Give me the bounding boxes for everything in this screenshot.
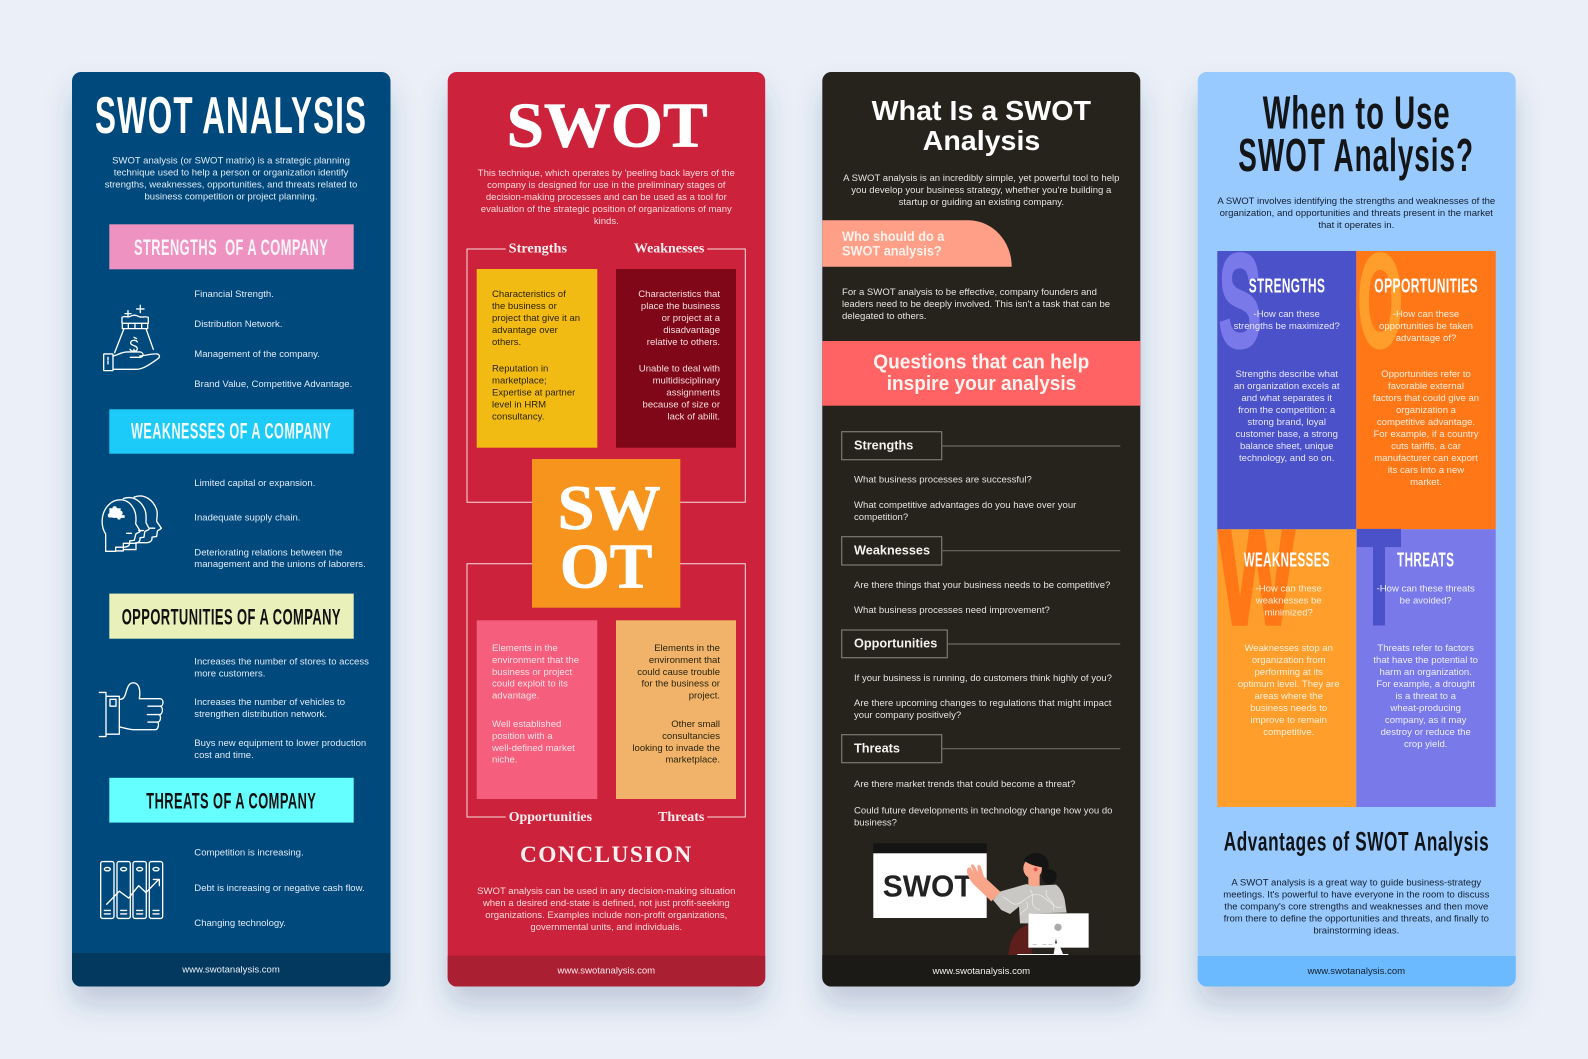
title [1238,86,1474,181]
cell: weaknesses: weaknesses be [1255,596,1322,606]
cell: weaknesses: -How can these [1256,584,1322,594]
box: opportunities: position with a [492,731,553,742]
opportunities list: strengthen distribution network. [194,709,327,720]
section: weaknesses [842,537,1120,616]
label: weaknesses: Weaknesses [634,242,705,257]
cell: strengths: Strengths describe what [1235,369,1338,380]
conclusion text: organizations. Examples include non-profit organizations, [485,910,727,921]
cell: threats: T [1357,501,1401,653]
cell: weaknesses: performing at its [1254,667,1323,678]
section: strengths [842,432,1120,523]
box: opportunities: well-defined market [491,743,575,754]
intro text [843,173,1119,208]
strengths list: Distribution Network. [194,319,282,330]
intro text [105,156,357,202]
cell: weaknesses: WEAKNESSES [1244,548,1330,571]
section: threats [842,735,1120,828]
cell: opportunities [1356,227,1496,529]
box: opportunities: could exploit to its [492,678,568,690]
opportunities list: Increases the number of vehicles to [194,697,345,708]
advantages text: from there to define the opportunities and threats, and finally to [1224,914,1489,924]
section: opportunities: Are there upcoming changes to regulations that might impact [854,698,1112,709]
who-should text: For a SWOT analysis to be effective, company founders and [842,287,1097,298]
cell: threats: destroy or reduce the [1381,727,1471,738]
footer: www.swotanalysis.com [556,966,655,976]
center block: SW OT: SW [558,472,661,543]
box: weaknesses: because of size or [643,400,721,410]
threats list: Changing technology. [194,918,286,929]
box: weaknesses: relative to others. [647,337,720,348]
frame lines [467,249,745,817]
cell: threats: be avoided? [1400,596,1452,606]
advantages text: meetings. It's powerful to have everyone in the room to discuss [1223,890,1490,900]
title: What Is a SWOT [872,95,1091,126]
section: opportunities [842,630,1120,721]
cell: opportunities: For example, if a country [1373,429,1479,440]
box: weaknesses: or project at a [662,313,721,324]
cell: opportunities: opportunities be taken [1379,321,1473,332]
box: weaknesses: Characteristics that [638,289,720,300]
weaknesses list: Deteriorating relations between the [194,548,342,558]
section: weaknesses: Weaknesses [854,543,930,558]
cell: opportunities: organization a [1396,405,1457,416]
section: strengths: What business processes are successful? [854,474,1032,486]
cell: threats: that have the potential to [1373,655,1478,666]
who-should text: leaders need to be deeply involved. This isn't a task that can be [842,299,1110,310]
title: When to Use [1263,86,1451,138]
cell: weaknesses: improve to remain [1250,715,1327,726]
box: threats: marketplace. [665,754,720,766]
intro text: business competition or project planning. [144,192,318,202]
callout: who should do a SWOT analysis: Who should do a [842,229,945,244]
box: opportunities [477,620,597,799]
intro text: organization, and opportunities and threats present in the market [1220,208,1493,219]
footer [448,956,765,986]
label: threats: Threats [658,810,705,825]
panel: SWOT Analysis (navy) [72,72,390,986]
footer: www.swotanalysis.com [1306,966,1405,977]
cell: strengths: an organization excels at [1234,381,1340,392]
cell: strengths: strengths be maximized? [1234,321,1340,332]
section: threats: Are there market trends that could become a threat? [854,779,1075,790]
intro text: strengths, weaknesses, opportunities, and threats related to [105,180,357,190]
panel: SWOT (red) [448,72,765,986]
cell: threats: wheat-producing [1389,703,1461,714]
cell: threats [1356,501,1496,807]
cell: threats: company, as it may [1385,715,1467,726]
label: strengths: Strengths [509,242,568,257]
box: opportunities: Elements in the [492,643,558,654]
cell: weaknesses: W [1218,502,1295,653]
advantages text [1223,878,1490,936]
section: weaknesses: Are there things that your business needs to be competitive? [854,580,1110,591]
cell: strengths: and what separates it [1241,393,1332,404]
intro text: you develop your business strategy, whether you're building a [851,185,1112,196]
box: threats: Elements in the [654,643,720,654]
advantages text: A SWOT analysis is a great way to guide business-strategy [1231,878,1481,888]
center block: SW OT: OT [560,531,652,602]
weaknesses list: management and the unions of laborers. [194,559,366,570]
footer [822,955,1140,986]
box: strengths: advantage over [492,325,559,336]
intro text [1217,196,1495,231]
cell: strengths: strong brand, loyal [1247,417,1326,428]
box: threats: consultancies [662,731,720,742]
section: strengths: Strengths [854,438,913,453]
cell: opportunities: manufacturer can export [1374,453,1478,464]
heading: threats: THREATS OF A COMPANY [146,788,316,814]
cell: threats: harm an organization. [1380,667,1472,678]
box: strengths: level in HRM [492,400,546,410]
heading: strengths [109,224,354,269]
illustration: woman presenting SWOT board [873,843,1089,956]
callout: who should do a SWOT analysis: SWOT analysis? [842,244,942,259]
box: strengths: others. [492,337,521,348]
section: threats: Could future developments in technology change how you do [854,806,1112,816]
opportunities list: cost and time. [194,750,254,761]
icon: heads with puzzle [102,496,161,551]
cell: opportunities: competitive advantage. [1377,417,1475,428]
intro text [478,168,735,227]
box: strengths: Expertise at partner [492,388,576,398]
opportunities list: Buys new equipment to lower production [194,738,366,749]
weaknesses list: Inadequate supply chain. [194,513,300,524]
advantages text: brainstorming ideas. [1313,926,1399,936]
icon: thumbs up [99,683,163,737]
cell: opportunities: market. [1410,477,1442,488]
box: weaknesses: place the business [641,301,720,312]
conclusion text: governmental units, and individuals. [530,922,682,933]
intro text: startup or guiding an existing company. [899,197,1064,208]
conclusion text [477,886,735,933]
title: SWOT: SWOT [507,90,708,161]
who-should text [842,287,1110,322]
box: weaknesses: lack of abilit. [667,412,720,422]
conclusion text: when a desired end-state is defined, not just profit-seeking [482,898,730,909]
illustration: woman presenting SWOT board: SWOT [883,869,973,904]
cell: threats: crop yield. [1404,739,1447,750]
footer: www.swotanalysis.com [181,964,280,976]
box: threats: for the business or [641,678,721,690]
cell: strengths: -How can these [1254,309,1320,320]
banner: questions [822,341,1140,406]
banner: questions: inspire your analysis [887,373,1076,395]
heading: weaknesses: WEAKNESSES OF A COMPANY [131,418,331,443]
cell: weaknesses: optimum level. They are [1238,679,1340,690]
strengths list [194,289,352,390]
strengths list: Management of the company. [194,349,320,360]
conclusion text: SWOT analysis can be used in any decision-making situation [477,886,735,897]
cell: weaknesses [1217,502,1356,807]
box: opportunities: environment that the [492,655,579,666]
intro text: This technique, which operates by 'peeling back layers of the [478,168,735,179]
box: weaknesses: multidisciplinary [653,376,720,386]
who-should text: delegated to others. [842,311,926,322]
section: strengths: competition? [854,512,908,523]
heading: conclusion: CONCLUSION [520,842,693,867]
section: opportunities: your company positively? [854,710,961,721]
cell: opportunities: cuts tariffs, a car [1391,441,1462,452]
box: strengths: Characteristics of [492,289,566,300]
cell: weaknesses: competitive. [1263,727,1314,738]
heading: opportunities [109,594,354,639]
box: opportunities: business or project [492,667,572,678]
box: opportunities: niche. [492,754,517,766]
section: threats: business? [854,818,897,828]
opportunities list: Increases the number of stores to access [194,656,369,668]
footer [72,953,390,986]
strengths list: Financial Strength. [194,289,274,300]
box: strengths: Reputation in [492,364,548,374]
box: opportunities: advantage. [492,690,539,702]
cell: strengths: customer base, a strong [1235,429,1338,440]
heading: opportunities: OPPORTUNITIES OF A COMPANY [122,605,341,630]
cell: opportunities: factors that could give an [1373,393,1479,404]
threats list: Competition is increasing. [194,848,304,859]
icon: binders with chart [101,862,163,918]
intro text: technique used to help a person or organization identify [114,168,349,178]
box: strengths: the business or [492,301,558,312]
cell: opportunities: favorable external [1388,381,1464,392]
intro text: A SWOT analysis is an incredibly simple, yet powerful tool to help [843,173,1119,184]
cell: threats: THREATS [1397,548,1454,571]
box: threats: project. [689,690,720,702]
box: strengths: marketplace; [492,376,547,386]
section: opportunities: If your business is running, do customers think highly of you? [854,673,1112,684]
opportunities list: more customers. [194,668,265,680]
cell: strengths: technology, and so on. [1239,453,1334,464]
box: threats [616,620,736,799]
cell: weaknesses: business needs to [1250,703,1327,714]
box: threats: environment that [649,655,720,666]
cell: strengths: from the competition: a [1238,405,1336,416]
box: opportunities: Well established [492,719,561,730]
opportunities list [194,656,369,761]
cell: strengths: balance sheet, unique [1240,441,1333,452]
weaknesses list [194,478,366,570]
box: weaknesses: disadvantage [663,325,720,336]
cell: threats: is a threat to a [1395,691,1457,702]
intro text: company is designed for use in the preliminary stages of [487,180,726,191]
cell: strengths: S [1218,227,1262,376]
intro text: kinds. [594,216,619,227]
cell: weaknesses: areas where the [1254,691,1323,702]
intro text: SWOT analysis (or SWOT matrix) is a strategic planning [112,156,350,166]
cell: opportunities: OPPORTUNITIES [1374,274,1478,297]
advantages text: the company's core strengths and weaknesses and then move [1224,902,1488,912]
cell: weaknesses: Weaknesses stop an [1244,643,1333,654]
heading: weaknesses [109,409,354,454]
weaknesses list: Limited capital or expansion. [194,478,315,489]
title [872,95,1091,156]
heading: strengths: STRENGTHS OF A COMPANY [134,235,328,260]
box: strengths: project that give it an [492,313,580,324]
threats list [194,848,365,929]
box: threats: looking to invade the [632,743,720,754]
footer: www.swotanalysis.com [931,966,1030,977]
icon: money bag on hand [104,305,159,371]
cell: strengths [1217,227,1356,529]
section: weaknesses: What business processes need improvement? [854,605,1050,616]
section: threats: Threats [854,741,900,756]
heading: threats [109,778,354,823]
title: Analysis [923,125,1040,156]
cell: threats: -How can these threats [1377,584,1475,594]
cell: opportunities: its cars into a new [1388,465,1464,476]
strengths list: Brand Value, Competitive Advantage. [194,379,352,390]
footer [1198,956,1516,986]
box: weaknesses: assignments [666,388,720,398]
center block: SW OT [532,459,680,608]
cell: strengths: STRENGTHS [1249,274,1325,297]
intro text: that it operates in. [1318,220,1394,231]
cell: weaknesses: organization from [1252,655,1326,666]
intro text: A SWOT involves identifying the strengths and weaknesses of the [1217,196,1495,207]
cell: threats: For example, a drought [1376,679,1475,690]
banner: questions: Questions that can help [873,351,1089,373]
title: SWOT ANALYSIS: SWOT ANALYSIS [95,87,367,145]
section: strengths: What competitive advantages do you have over your [854,500,1077,511]
cell: opportunities: O [1358,227,1403,376]
box: strengths: consultancy. [492,412,544,422]
cell: opportunities: advantage of? [1396,333,1456,344]
box: strengths [477,269,597,448]
cell: opportunities: Opportunities refer to [1381,369,1471,380]
section: opportunities: Opportunities [854,636,937,651]
callout: who should do a SWOT analysis [822,220,1012,267]
intro text: decision-making processes and can be used as a tool for [486,192,728,203]
cell: weaknesses: minimized? [1265,608,1313,618]
intro text: evaluation of the strategic position of organizations of many [481,204,732,215]
label: opportunities: Opportunities [509,810,593,825]
box: threats: Other small [671,719,720,730]
box: threats: could cause trouble [637,667,720,678]
box: weaknesses: Unable to deal with [639,364,720,374]
cell: opportunities: -How can these [1393,309,1459,320]
threats list: Debt is increasing or negative cash flow. [194,883,365,894]
cell: threats: Threats refer to factors [1377,643,1474,654]
box: weaknesses [616,269,736,448]
panel: What Is a SWOT Analysis (dark) [822,72,1140,986]
panel: When to Use SWOT Analysis (light blue) [1198,72,1516,986]
